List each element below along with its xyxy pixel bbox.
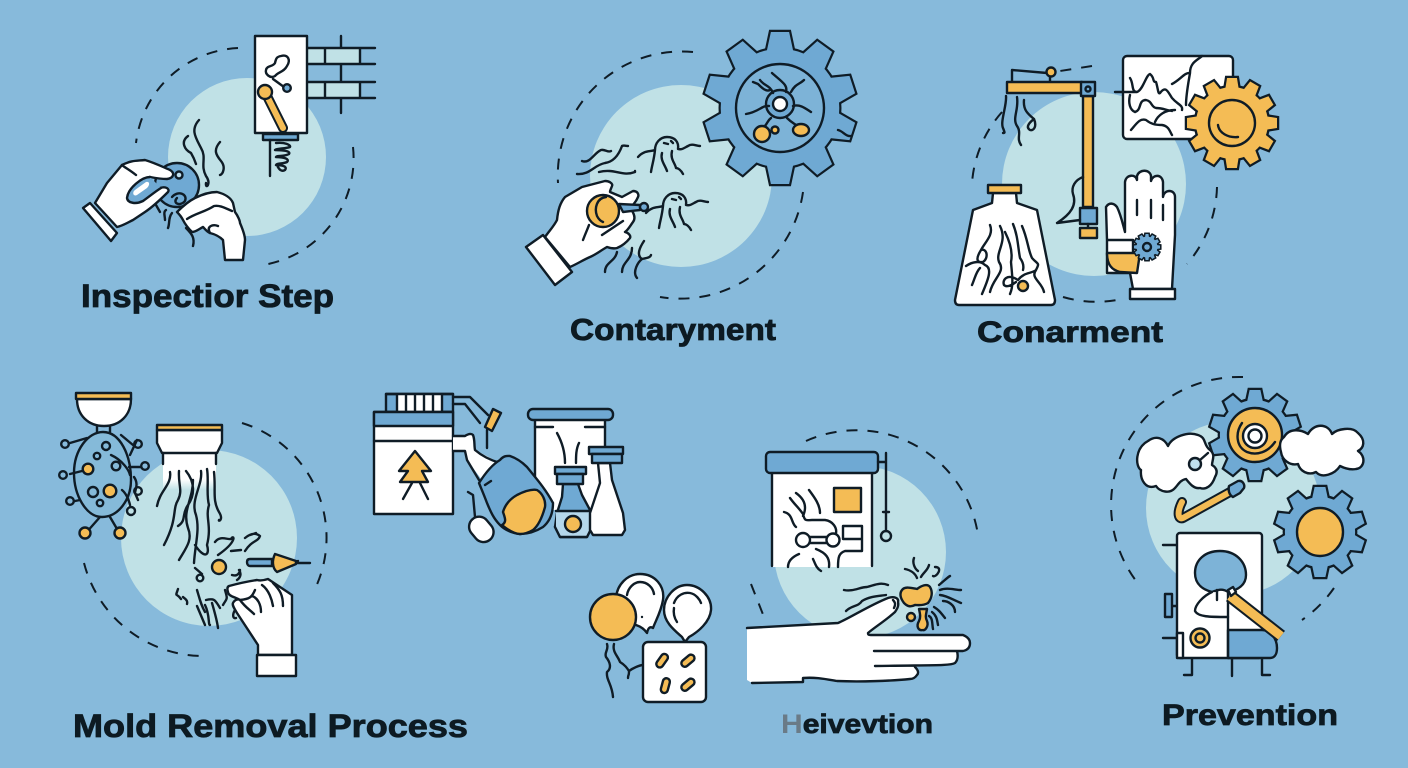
dashed ring	[136, 48, 354, 265]
heading: Heivevtion	[781, 709, 933, 739]
icon: hand with orange sample	[526, 181, 648, 285]
mold squiggles	[577, 146, 651, 278]
panel: mold removal process	[59, 393, 468, 744]
icon: white bottle	[589, 447, 625, 535]
background circle	[590, 85, 772, 267]
icon: gloved hand with small gear	[1106, 171, 1175, 299]
panel: containment	[526, 32, 857, 347]
background circle	[774, 466, 946, 638]
dashed ring	[751, 430, 978, 617]
orange mold blob	[901, 585, 932, 606]
dashed ring	[558, 51, 803, 299]
orange mold spot	[212, 560, 226, 574]
icon: labelled container	[374, 394, 453, 514]
heading: Prevention	[1162, 699, 1338, 732]
icon: lower gear	[1275, 487, 1365, 577]
panel: hand and building	[747, 430, 978, 739]
icon: brick wall	[307, 36, 375, 113]
icon: left hand with cuff	[83, 160, 173, 241]
orange drop	[918, 609, 928, 630]
dashed ring	[1111, 377, 1334, 620]
heading: Contaryment	[570, 312, 776, 347]
icon: right hand with swab	[156, 192, 245, 260]
orange drips	[907, 613, 915, 621]
panel: confinement	[955, 56, 1277, 349]
mold debris	[176, 533, 260, 628]
icon: wall sensor with probe	[255, 36, 307, 176]
heading: Conarment	[977, 316, 1163, 349]
panel: prevention	[1111, 377, 1365, 732]
mold wavy lines	[844, 584, 888, 611]
icon: prevention machine	[1163, 533, 1281, 676]
icon: spray bulb flask	[465, 456, 553, 546]
heading: Inspectior Step	[81, 278, 334, 314]
icon: wall panel with circuit	[766, 452, 891, 571]
splash lines	[905, 558, 961, 629]
dashed ring	[84, 423, 327, 656]
icon: spray head with strands	[157, 425, 222, 563]
heading: Mold Removal Process	[73, 708, 468, 744]
icon: pointing hand	[747, 597, 970, 683]
icon: blue flask	[555, 467, 592, 537]
icon: hose and nozzle	[453, 397, 501, 480]
background circle	[168, 78, 326, 236]
panel: inspection step	[81, 36, 375, 314]
icon: crack map	[1115, 56, 1233, 139]
icon: hand with cuff	[227, 579, 296, 676]
background circle	[121, 450, 297, 626]
icon: large jar	[528, 409, 613, 510]
icon: left cloud	[1137, 434, 1217, 492]
icon: inspection disc	[155, 163, 199, 207]
icon: top gear	[1210, 390, 1300, 480]
icon: orange balloon	[590, 594, 636, 640]
icon: gantry arm	[1007, 68, 1097, 238]
icon: tile with orange spots	[643, 642, 706, 702]
panel: cleaning supplies	[374, 394, 625, 546]
icon: orange gear	[1187, 78, 1277, 168]
icon: mold gear	[703, 32, 857, 184]
mold wavy lines	[184, 120, 224, 186]
icon: mold jar	[955, 185, 1055, 305]
icon: white balloons	[616, 574, 711, 642]
panel: balloons and mold tile	[590, 574, 711, 702]
icon: mold spore under bowl	[59, 393, 149, 538]
icon: hook tool	[1179, 481, 1244, 518]
mold creature upper	[638, 137, 700, 174]
dashed ring	[972, 66, 1217, 302]
mold strands under arm	[1002, 96, 1035, 145]
balloon strings	[606, 644, 643, 697]
icon: right cloud	[1280, 426, 1363, 475]
icon: dropper	[247, 554, 310, 572]
mold creature lower	[646, 193, 708, 230]
background circle	[1146, 421, 1320, 595]
background circle	[1002, 92, 1186, 276]
